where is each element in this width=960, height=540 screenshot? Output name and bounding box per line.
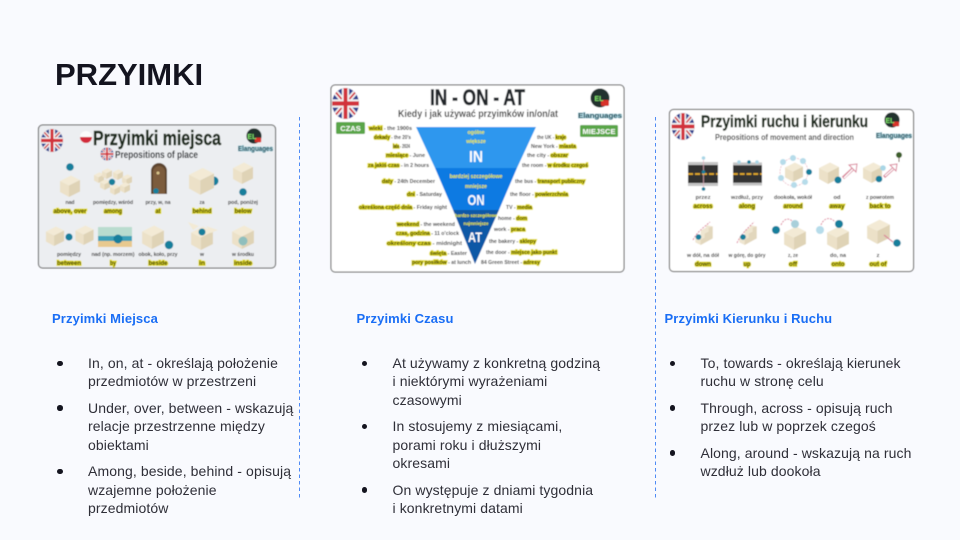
logo: Elanguages <box>238 128 273 153</box>
item: above, over <box>54 163 87 215</box>
item: along <box>730 160 764 210</box>
time examples: wieki - the 1900s <box>368 126 412 132</box>
funnel level: ON: ON <box>468 192 484 209</box>
item: onto: onto <box>832 261 845 268</box>
item: around <box>774 155 812 210</box>
bullet: among beside behind <box>57 463 292 516</box>
bullet: to towards <box>670 355 901 389</box>
logo: Elanguages <box>876 112 912 140</box>
logo: Elanguages: EL <box>248 134 257 141</box>
item: up: up <box>744 261 751 268</box>
item: off: z, ze <box>788 253 798 259</box>
heading: time: Przyimki Czasu <box>356 311 454 326</box>
item: beside <box>138 226 178 267</box>
funnel level: AT: AT <box>468 229 482 245</box>
time examples: dekady - the 20's <box>374 135 411 141</box>
label: miejsce <box>580 125 618 137</box>
bullet: on: On występuje z dniami tygodnia <box>392 482 593 498</box>
funnel level: ON: mniejsze <box>465 184 487 190</box>
logo: Elanguages: Elanguages <box>578 113 622 120</box>
bullet: on: i konkretnymi datami <box>392 500 523 516</box>
logo: Elanguages <box>578 88 622 120</box>
poster subtitle: Prepositions of place <box>115 150 198 161</box>
bullet: at: czasowymi <box>392 392 462 408</box>
item: behind: behind <box>192 208 212 215</box>
bullet: under over between: obiektami <box>88 437 149 453</box>
logo: Elanguages: EL <box>886 118 895 125</box>
funnel level: IN: większe <box>465 139 486 145</box>
item: below <box>228 162 258 215</box>
bullet: at <box>362 355 600 408</box>
bullet: in: okresami <box>392 455 450 471</box>
bullet: in: porami roku i dłuższymi <box>392 437 541 453</box>
place examples <box>481 135 588 266</box>
time examples <box>359 126 472 266</box>
time examples: weekend - the weekend <box>396 222 456 228</box>
item: among: among <box>104 208 122 215</box>
item: away: away <box>830 203 845 210</box>
time examples: czas, godzina - 11 o'clock <box>396 231 460 237</box>
item: across: przez <box>696 195 711 201</box>
funnel level: AT <box>453 210 499 264</box>
item: by: nad (np. morzem) <box>92 252 135 258</box>
time examples: określona część dnia - Friday night <box>359 205 447 211</box>
item: in: in <box>199 260 205 267</box>
item: in: w <box>199 252 205 258</box>
item: between <box>46 225 94 267</box>
time examples: określony czas - midnight <box>387 241 462 247</box>
time examples: lata - 2024 <box>393 144 411 150</box>
bullet: at: i niektórymi wyrażeniami <box>392 373 547 389</box>
place examples: the bakery - sklepy <box>489 239 537 245</box>
item: beside: obok, koło, przy <box>138 252 178 258</box>
label: miejsce: MIEJSCE <box>583 127 615 136</box>
item: across: across <box>694 203 713 210</box>
bullet: along around: Along, around - wskazują na ruch <box>700 445 912 461</box>
bullet: along around <box>670 445 912 479</box>
bullet: on <box>362 482 594 516</box>
logo: Elanguages: Elanguages <box>238 146 273 153</box>
time examples: święta - Easter <box>430 251 468 257</box>
bullet: through across: przez lub w poprzek czegoś <box>700 418 876 434</box>
label: czas <box>336 122 365 134</box>
bullet: under over between <box>57 400 294 453</box>
item: onto: do, na <box>830 253 847 259</box>
item: around: dookoła, wokół <box>774 195 812 201</box>
item: at: at <box>156 208 161 215</box>
bullet: under over between: relacje przestrzenne między <box>88 418 265 434</box>
poster title: IN - ON - AT <box>430 85 525 110</box>
funnel level: IN: IN <box>469 149 483 166</box>
bullet: in on at <box>57 355 278 389</box>
image: in on at poster <box>331 85 624 272</box>
funnel level: IN: ogólne <box>467 130 485 136</box>
place examples: the city - obszar <box>527 153 569 159</box>
logo: Elanguages: EL <box>595 96 604 103</box>
item: by <box>92 227 135 267</box>
item: among <box>93 168 133 215</box>
item: across <box>688 156 718 210</box>
bullet: through across <box>670 400 893 434</box>
item: back to: back to <box>870 203 891 210</box>
funnel level: AT: bardzo szczegółowe <box>455 213 498 218</box>
place examples: TV - media <box>506 205 533 211</box>
place examples: the UK - kraje <box>537 135 566 141</box>
item: out of: out of <box>870 261 887 268</box>
bullet: in on at: In, on, at - określają położenie <box>88 355 278 371</box>
logo: Elanguages: Elanguages <box>876 133 912 140</box>
title: PRZYIMKI <box>55 57 203 92</box>
item: around: around <box>784 203 803 210</box>
item: above, over: nad <box>66 200 74 206</box>
item: in <box>188 222 218 267</box>
bullet list: time <box>362 355 600 516</box>
bullet: among beside behind: Among, beside, behind - opisują <box>88 463 291 479</box>
time examples: za jakiś czas - in 2 hours <box>368 163 429 169</box>
funnel level: IN <box>416 127 536 168</box>
poster subtitle: Kiedy i jak używać przyimków in/on/at <box>398 109 559 120</box>
item: below: pod, poniżej <box>228 200 258 206</box>
place examples: the floor - powierzchnia <box>510 192 569 198</box>
bullet: through across: Through, across - opisują ruch <box>700 400 893 416</box>
item: beside: beside <box>148 260 168 267</box>
icon: UK flag <box>41 129 63 152</box>
heading: direction: Przyimki Kierunku i Ruchu <box>664 311 832 326</box>
image: prepositions of movement poster <box>670 110 914 272</box>
bullet list: direction <box>670 355 912 479</box>
heading: place: Przyimki Miejsca <box>52 311 158 326</box>
place examples: 84 Green Street - adresy <box>481 260 541 266</box>
item: off: off <box>789 261 798 268</box>
item: down: w dół, na dół <box>686 253 719 259</box>
item: between: between <box>57 260 81 267</box>
bullet: in: In stosujemy z miesiącami, <box>392 418 562 434</box>
poster title: Przyimki miejsca <box>93 128 222 150</box>
bullet: in on at: przedmiotów w przestrzeni <box>88 373 256 389</box>
item: back to: z powrotem <box>866 195 894 201</box>
item: down <box>686 222 719 268</box>
place examples: the room - w środku czegoś <box>522 163 588 169</box>
item: by: by <box>110 260 116 267</box>
item: up <box>728 222 766 268</box>
icon: UK flag <box>672 113 694 140</box>
item: below: below <box>234 208 252 215</box>
item: at: przy, w, na <box>146 200 171 206</box>
item: inside: inside <box>234 260 252 267</box>
item: between: pomiędzy <box>57 252 82 258</box>
item: away <box>819 162 857 210</box>
item: behind <box>189 168 218 215</box>
time examples: pory posiłków - at lunch <box>412 260 472 266</box>
place examples: home - dom <box>498 216 527 222</box>
item: out of: z <box>876 253 880 259</box>
bullet: among beside behind: wzajemne położenie <box>88 482 217 498</box>
item: onto <box>816 219 849 268</box>
item: down: down <box>695 261 711 268</box>
item: up: w górę, do góry <box>728 253 766 259</box>
item: off <box>772 219 806 268</box>
label: czas: CZAS <box>340 124 361 133</box>
bullet: to towards: ruchu w stronę celu <box>700 373 824 389</box>
bullet: along around: wzdłuż lub dookoła <box>700 463 821 479</box>
bullet list: place <box>57 355 294 516</box>
item: among: pomiędzy, wśród <box>93 200 133 206</box>
item: back to <box>863 152 902 210</box>
poster subtitle: Prepositions of movement and direction <box>715 132 854 142</box>
poster title: Przyimki ruchu i kierunku <box>701 112 868 131</box>
item: inside <box>231 226 254 267</box>
funnel diagram <box>416 127 536 264</box>
place examples: work - praca <box>493 227 526 233</box>
bullet: to towards: To, towards - określają kierunek <box>700 355 901 371</box>
image: prepositions of place poster <box>38 125 276 268</box>
item: along: along <box>739 203 755 210</box>
time examples: dni - Saturday <box>407 192 443 198</box>
item: at <box>146 163 171 215</box>
bullet: among beside behind: przedmiotów <box>88 500 168 516</box>
item: away: od <box>834 195 840 201</box>
place examples: New York - miasta <box>531 144 577 150</box>
item: out of <box>867 220 901 268</box>
bullet: in <box>362 418 562 471</box>
icon: small UK flag <box>100 148 114 160</box>
funnel level: AT: najmniejsze <box>464 221 489 226</box>
place examples: the bus - transport publiczny <box>515 179 586 185</box>
icon: UK flag <box>332 88 359 119</box>
place examples: the door - miejsce jako punkt <box>486 250 557 256</box>
item: along: wzdłuż, przy <box>730 195 764 201</box>
item: above, over: above, over <box>54 208 87 215</box>
time examples: daty - 24th December <box>382 179 436 185</box>
item: inside: w środku <box>231 252 254 258</box>
icon: Polish flag <box>80 131 92 143</box>
bullet: under over between: Under, over, between - wskazują <box>88 400 293 416</box>
funnel level: ON <box>435 168 517 210</box>
time examples: miesiące - June <box>386 153 425 159</box>
bullet: at: At używamy z konkretną godziną <box>392 355 600 371</box>
item: behind: za <box>200 200 205 206</box>
funnel level: ON: bardziej szczegółowe <box>450 174 502 180</box>
